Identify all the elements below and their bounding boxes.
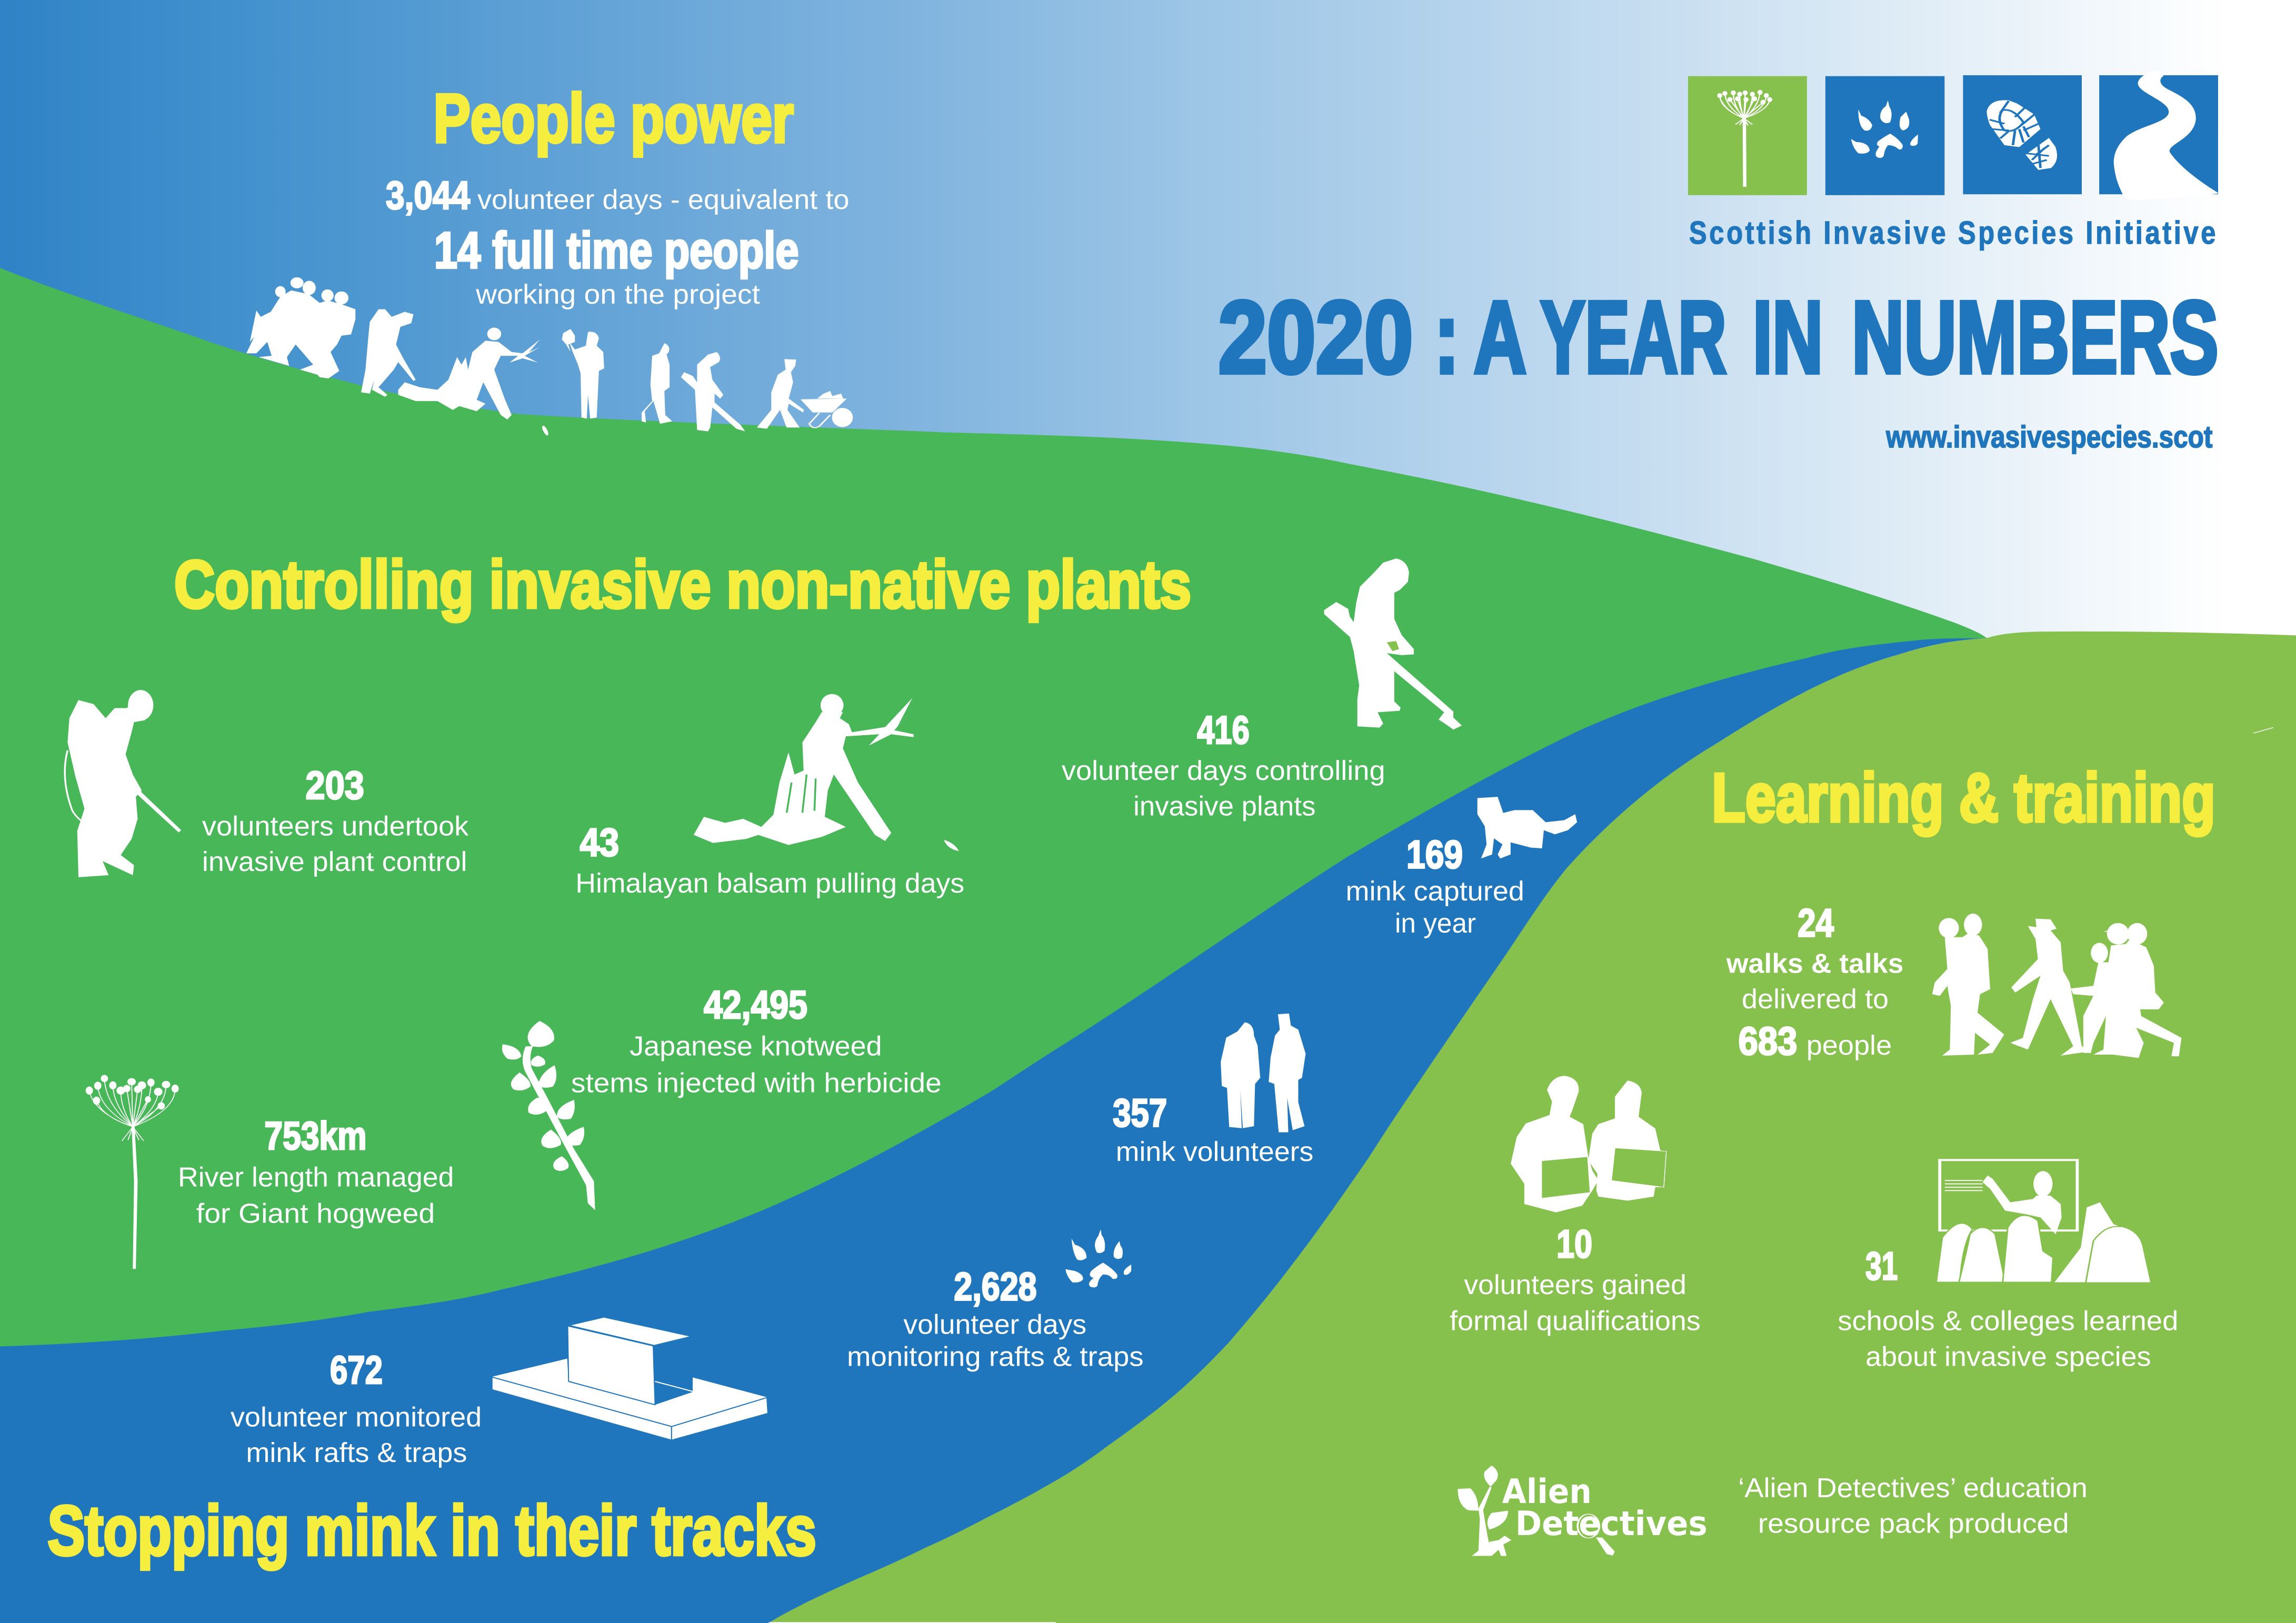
icon: paw print logo tile	[1825, 76, 1944, 195]
main title: YEAR	[1541, 280, 1726, 395]
panel background: mink river band	[0, 615, 1986, 1623]
wordmark: detectives: Detectives	[1515, 1506, 1708, 1544]
icon: man with backpack sprayer	[65, 690, 181, 877]
panel: people power	[246, 79, 853, 436]
wordmark: alien: Alien	[1502, 1474, 1592, 1512]
icon: sprayer volunteer	[361, 309, 416, 397]
stat: 169 mink captured: 169	[1406, 833, 1463, 877]
stat: 357 mink volunteers: mink volunteers	[1116, 1136, 1313, 1167]
icon: teacher and classroom	[1936, 1160, 2150, 1282]
icon: strimmer	[681, 352, 745, 432]
thin white strip along bottom edge	[768, 1622, 1056, 1623]
stat: 416 volunteer days: 416	[1197, 708, 1250, 753]
panel: learning and training	[1450, 758, 2215, 1556]
heading: controlling plants: Controlling invasive non-native plants	[174, 546, 1191, 622]
icon: hiking group	[246, 277, 355, 378]
stat: 416 volunteer days: invasive plants	[1133, 790, 1316, 821]
panel background: controlling plants hill	[0, 268, 1987, 1347]
icon: giant hogweed	[86, 1075, 179, 1269]
panel: header and logos	[1219, 71, 2219, 455]
stat: volunteer days: volunteer days - equivalent to	[477, 184, 849, 215]
stat: 10 qualifications	[1450, 1223, 1701, 1336]
icon: river logo tile	[2099, 71, 2218, 200]
stat: 43 balsam days: 43	[580, 821, 619, 865]
stat: 753km river	[178, 1114, 454, 1229]
heading: stopping mink: Stopping mink in their tracks	[47, 1494, 816, 1571]
stat: 31 schools and colleges: about invasive species	[1865, 1341, 2151, 1372]
stat: 416 volunteer days: volunteer days controlling	[1062, 755, 1385, 786]
stat: volunteer days	[386, 174, 849, 218]
stat: 2,628 volunteer days	[847, 1265, 1144, 1372]
icon: group walking	[1932, 914, 2181, 1058]
icon: volunteers silhouettes on the hillside	[246, 277, 853, 436]
stat: 42,495 knotweed stems: 42,495	[704, 983, 807, 1027]
icon: person pulling balsam	[694, 694, 959, 851]
icon: boot print logo tile	[1963, 75, 2082, 194]
stat: 203 volunteers: 203	[306, 764, 364, 808]
stat: full time people: 14 full time people	[434, 223, 799, 279]
stat: 42,495 knotweed stems: stems injected with herbicide	[571, 1067, 942, 1098]
text: alien detectives resource pack: resource pack produced	[1758, 1508, 2069, 1539]
stat: 672 rafts: mink rafts & traps	[246, 1437, 467, 1468]
icon: hogweed logo tile	[1688, 76, 1807, 195]
stat: 416 volunteer days	[1062, 708, 1385, 821]
icon: japanese knotweed	[502, 1021, 595, 1210]
main title: IN	[1753, 280, 1823, 395]
icon: mink raft	[492, 1317, 768, 1440]
main title	[1219, 280, 2219, 395]
stat: 203 volunteers: volunteers undertook	[202, 810, 470, 841]
stat: 357 mink volunteers: 357	[1113, 1091, 1167, 1135]
stat: 2,628 volunteer days: volunteer days	[903, 1309, 1086, 1339]
icon: man with strimmer	[1324, 558, 1462, 729]
stat: 753km river: for Giant hogweed	[196, 1198, 435, 1229]
stat: 169 mink captured: mink captured	[1346, 876, 1524, 906]
stat: 42,495 knotweed stems: Japanese knotweed	[630, 1030, 882, 1061]
stat: 169 mink captured	[1346, 833, 1524, 938]
text: alien detectives resource pack: ‘Alien Detectives’ education	[1738, 1472, 2088, 1503]
icon: wheelbarrow person	[757, 359, 847, 429]
stat: 31 schools and colleges	[1838, 1245, 2178, 1372]
heading: people power: People power	[433, 79, 794, 157]
icon: balsam puller	[398, 328, 540, 419]
icon: two mink volunteers	[1221, 1014, 1305, 1132]
stat: 203 volunteers: invasive plant control	[202, 846, 467, 877]
tiny white tick on hill	[2253, 728, 2273, 733]
stat: 672 rafts	[231, 1348, 482, 1468]
main title: 2020	[1219, 280, 1413, 395]
stat: 753km river: 753km	[264, 1114, 367, 1158]
caption: working on the project: working on the project	[474, 279, 761, 309]
stat: walks and talks: people	[1806, 1030, 1892, 1060]
stat: 10 qualifications: formal qualifications	[1450, 1305, 1701, 1336]
stat: 31 schools and colleges: schools & colleges learned	[1838, 1305, 2178, 1336]
main title: :	[1434, 280, 1459, 395]
stat: walks and talks: walks & talks	[1725, 948, 1903, 978]
stat: 31 schools and colleges: 31	[1865, 1245, 1898, 1288]
stat: 753km river: River length managed	[178, 1161, 454, 1193]
icon: two students with folders	[1511, 1076, 1666, 1213]
icon: plant, cat and magnifier	[1458, 1466, 1615, 1556]
website address: www.invasivespecies.scot	[1885, 421, 2212, 455]
stat: 43 balsam days	[575, 821, 964, 898]
stat: 203 volunteers	[202, 764, 470, 877]
stat: 10 qualifications: volunteers gained	[1464, 1269, 1686, 1300]
stat: 672 rafts: volunteer monitored	[231, 1401, 482, 1432]
stat: 2,628 volunteer days: 2,628	[954, 1265, 1037, 1309]
stat: walks and talks: delivered to	[1742, 984, 1889, 1014]
stat: 42,495 knotweed stems	[571, 983, 942, 1098]
stat: 672 rafts: 672	[330, 1348, 383, 1392]
stat: walks and talks: 683	[1739, 1019, 1797, 1063]
stat: 169 mink captured: in year	[1395, 908, 1476, 938]
stat: walks and talks: 24	[1798, 901, 1834, 945]
panel: stopping mink in their tracks	[47, 797, 1577, 1571]
stat: 2,628 volunteer days: monitoring rafts & traps	[847, 1341, 1144, 1372]
stat: 43 balsam days: Himalayan balsam pulling days	[575, 868, 964, 898]
icon: person holding plant	[562, 329, 604, 419]
text: alien detectives resource pack	[1738, 1472, 2088, 1539]
panel: controlling invasive non-native plants	[65, 546, 1462, 1269]
icon: mink paw print	[1065, 1229, 1131, 1287]
stat: walks and talks	[1725, 901, 1903, 1063]
stat: 357 mink volunteers	[1113, 1091, 1313, 1167]
icon: walker	[642, 343, 672, 424]
stat: volunteer days: 3,044	[386, 174, 470, 218]
panel background: learning and training hill	[768, 632, 2296, 1623]
logo: alien detectives	[1458, 1466, 1708, 1556]
main title: A	[1474, 280, 1526, 395]
icon: mink	[1478, 797, 1577, 858]
stat: 10 qualifications: 10	[1556, 1223, 1592, 1266]
